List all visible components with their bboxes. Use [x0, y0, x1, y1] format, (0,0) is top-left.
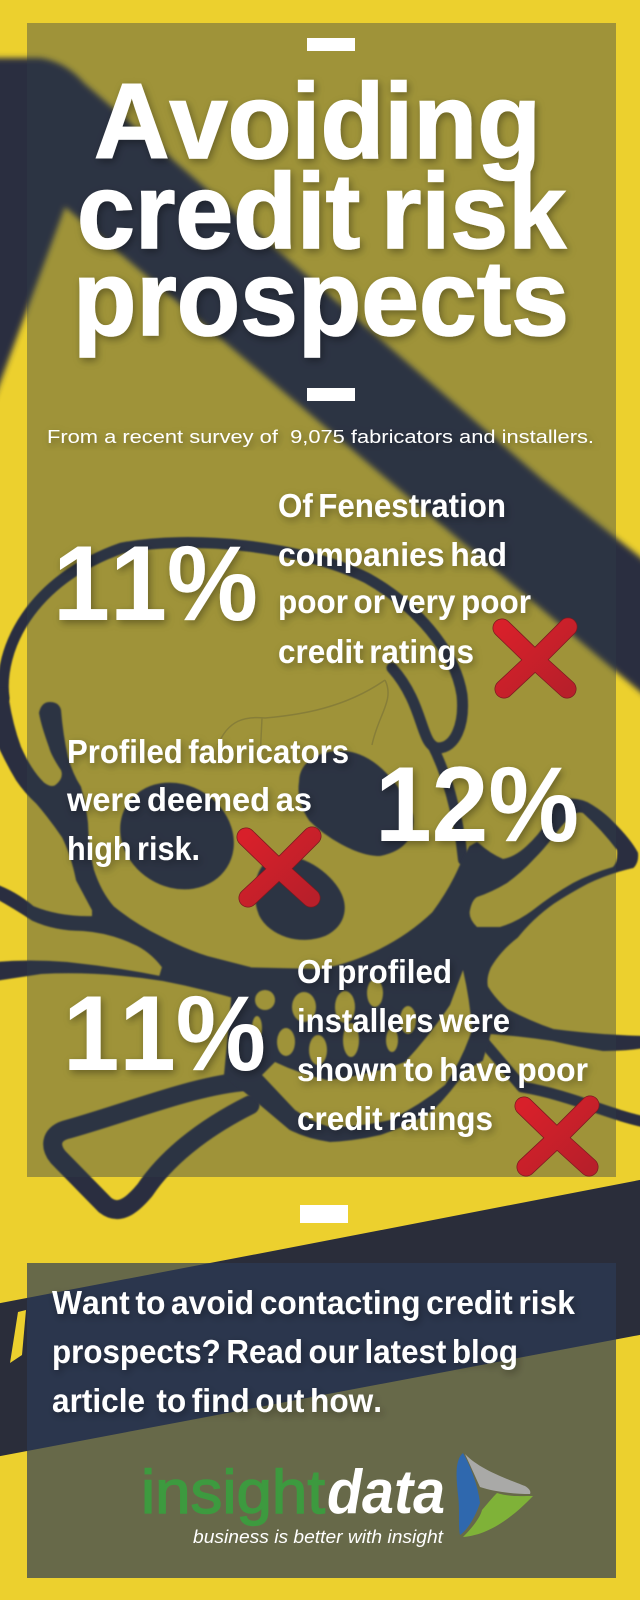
- logo: insightdata: [141, 1453, 533, 1547]
- stat description: [66, 733, 349, 867]
- stat description: Of Fenestration: [278, 487, 506, 524]
- stat description: installers were: [297, 1002, 510, 1039]
- skull bones and jaw masses: [0, 690, 640, 1141]
- divider bar above call to action: [300, 1205, 348, 1223]
- logo tagline: business is better with insight: [193, 1527, 444, 1547]
- stat description: high risk.: [67, 830, 200, 867]
- blurred warning triangle band: [0, 58, 640, 700]
- title: credit risk: [77, 151, 566, 271]
- icon: logo triangle: [457, 1453, 533, 1537]
- stat: 11% of fenestration companies: [53, 487, 568, 689]
- icon: red cross: [524, 1105, 590, 1167]
- icon: red cross: [246, 836, 312, 898]
- call to action text: prospects? Read our latest blog: [52, 1333, 518, 1370]
- forehead cracks: [218, 680, 388, 760]
- stat: 11% of profiled installers: [63, 953, 590, 1167]
- divider bar top: [307, 38, 355, 51]
- stat description: companies had: [278, 536, 507, 573]
- stat description: Profiled fabricators: [67, 733, 349, 770]
- title: [73, 61, 569, 358]
- subtitle: From a recent survey of 9,075 fabricators and installers.: [47, 426, 594, 447]
- logo wordmark: insight: [141, 1458, 325, 1526]
- title: Avoiding: [94, 61, 541, 181]
- stat: 12% of profiled fabricators: [66, 733, 579, 898]
- stat number 12%: 12%: [375, 744, 579, 864]
- call to action text: [52, 1284, 576, 1419]
- call to action text: Want to avoid contacting credit risk: [52, 1284, 576, 1321]
- stat number 11%: 11%: [63, 973, 266, 1093]
- stat description: [278, 487, 531, 670]
- skull yellow gaps and teeth: [252, 812, 617, 1127]
- logo wordmark: data: [327, 1458, 445, 1527]
- stat description: poor or very poor: [278, 583, 531, 620]
- skull outline strokes: [3, 542, 640, 1210]
- lower dark diagonal band: [0, 1178, 640, 1458]
- stat description: [297, 953, 588, 1137]
- title: prospects: [73, 238, 569, 358]
- stat description: shown to have poor: [297, 1051, 588, 1088]
- stat description: credit ratings: [297, 1100, 493, 1137]
- logo wordmark: [141, 1458, 445, 1527]
- stat description: Of profiled: [297, 953, 452, 990]
- stat description: were deemed as: [66, 781, 312, 818]
- stat description: credit ratings: [278, 633, 474, 670]
- panel: call to action overlay: [27, 1263, 616, 1578]
- panel: main survey overlay: [27, 23, 616, 1177]
- icon: red cross: [502, 627, 568, 689]
- stat number 11%: 11%: [53, 523, 258, 643]
- call to action text: article to find out how.: [52, 1382, 382, 1419]
- divider bar below title: [307, 388, 355, 401]
